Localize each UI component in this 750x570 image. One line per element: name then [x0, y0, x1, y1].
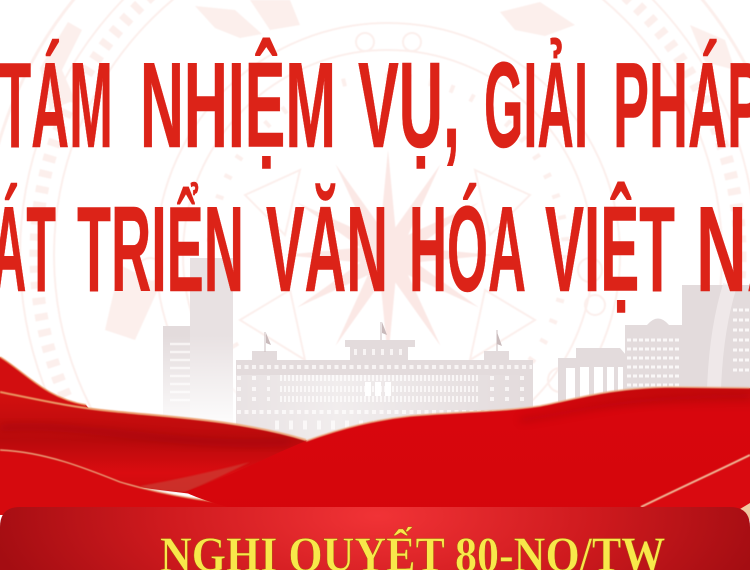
center fold highlight: [140, 462, 250, 492]
drum spirals: [138, 33, 605, 392]
title line 2: VĂN: [266, 181, 388, 317]
star outline triangles: [240, 170, 535, 360]
left tower fade: [160, 335, 236, 425]
colonnade building: [558, 348, 626, 410]
title line 2: TRIỂN: [77, 181, 244, 317]
title line 1: VỤ,: [358, 37, 460, 173]
right shading: [520, 396, 750, 420]
upper left ribbon: [0, 357, 92, 412]
title line 2: [0, 181, 750, 317]
title line 1: TÁM: [0, 37, 113, 173]
title line 2: HÓA: [409, 181, 526, 317]
left towers: [163, 258, 233, 428]
title line 1: [0, 36, 750, 173]
fold shadow: [0, 427, 290, 443]
title line 1: GIẢI: [484, 36, 588, 173]
bottom banner panel: [0, 507, 750, 570]
red flag ribbons: [0, 357, 750, 520]
skyline fade: [236, 375, 526, 445]
star: [283, 150, 493, 360]
middle ribbon: [0, 392, 320, 500]
main palace: [236, 322, 533, 442]
large right ribbon: [185, 387, 750, 515]
corner ribbon: [641, 455, 750, 515]
bird and deer figures: [40, 0, 735, 340]
title line 1: NHIỆM: [140, 37, 336, 173]
city skyline: [163, 258, 750, 442]
lower left ribbon: [0, 450, 252, 515]
right towers: [625, 285, 750, 395]
title: [0, 36, 750, 317]
